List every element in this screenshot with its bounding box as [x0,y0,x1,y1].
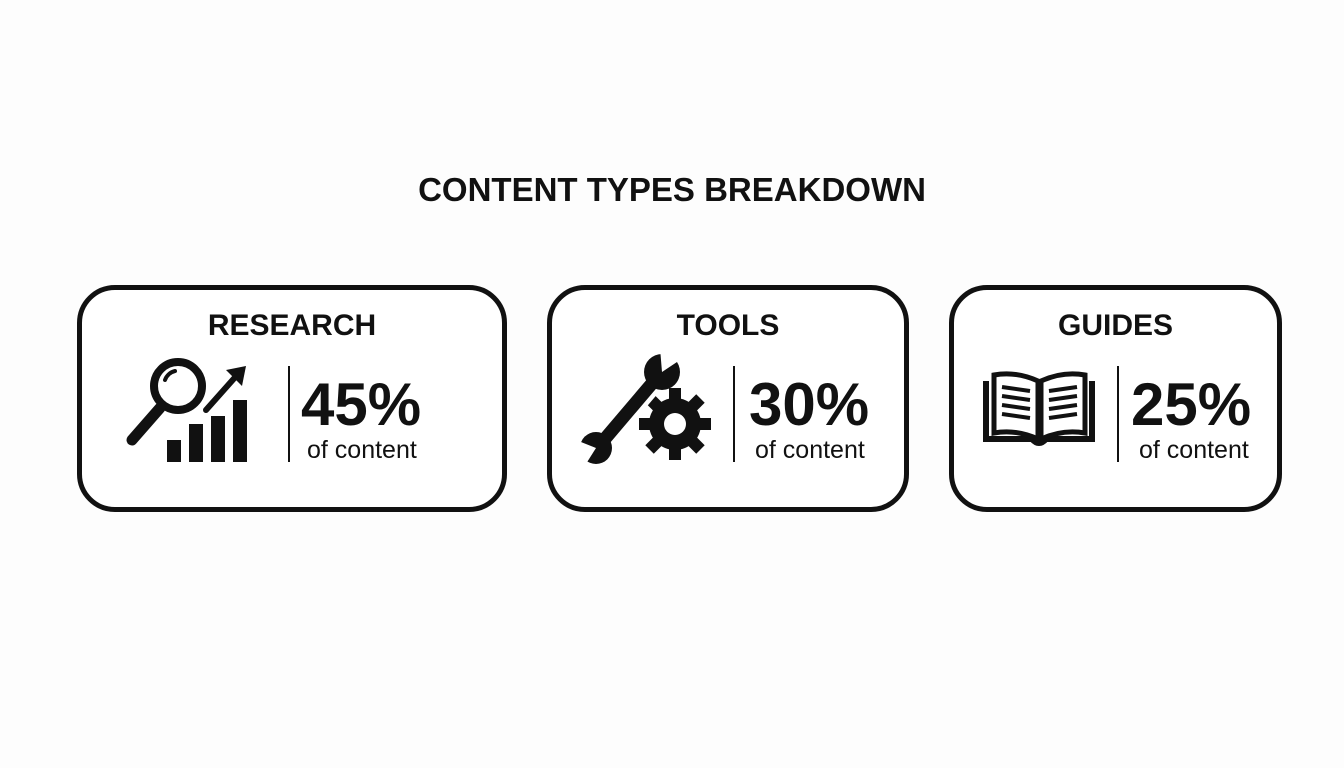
divider [1117,366,1119,462]
stat: 25%: 25% [1131,371,1251,438]
icon: wrench and gear [581,354,711,464]
caption: of content [307,436,417,464]
divider [288,366,290,462]
caption: of content [1139,436,1249,464]
panel: tools [547,285,909,512]
heading: guides: GUIDES [1058,309,1173,342]
stat: 30%: 30% [749,371,869,438]
icon: open book [983,371,1095,446]
divider [733,366,735,462]
stat: 45%: 45% [301,371,421,438]
icon: magnifier with chart [126,358,247,462]
caption: of content [755,436,865,464]
title: CONTENT TYPES BREAKDOWN [418,171,926,208]
panel: research [77,285,507,512]
heading: tools: TOOLS [677,309,779,342]
panel: guides [949,285,1282,512]
heading: research: RESEARCH [208,309,376,342]
